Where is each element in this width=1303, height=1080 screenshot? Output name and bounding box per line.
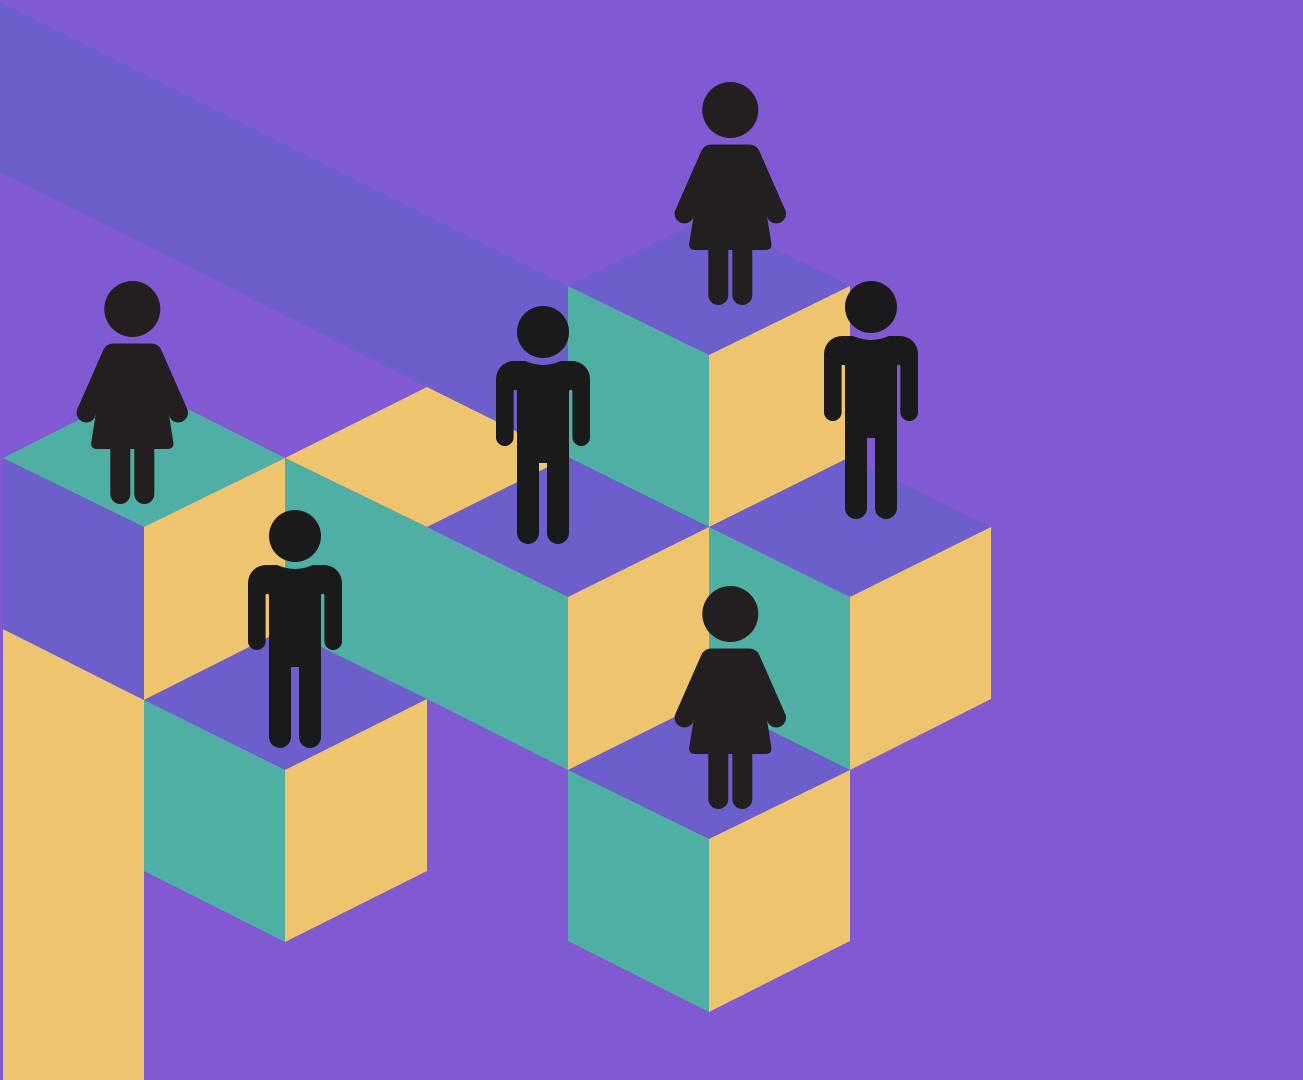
- icon: man, lower left: [248, 510, 342, 748]
- icon: woman, left: [77, 281, 188, 504]
- cube: left with teal top: [3, 387, 285, 700]
- icon: man, right: [824, 281, 918, 519]
- cube: lower left: [144, 629, 427, 942]
- icon: woman, top: [675, 82, 786, 305]
- cube: lower centre: [568, 700, 850, 1012]
- yellow column: [3, 629, 144, 1080]
- diagonal band: [0, 2, 709, 527]
- cube: centre: [427, 457, 709, 770]
- icon: woman, lower centre: [675, 586, 786, 809]
- icon: man, centre: [496, 306, 590, 544]
- cube: top centre: [568, 216, 850, 527]
- cube: back yellow top: [285, 387, 568, 699]
- cube: right: [709, 457, 991, 770]
